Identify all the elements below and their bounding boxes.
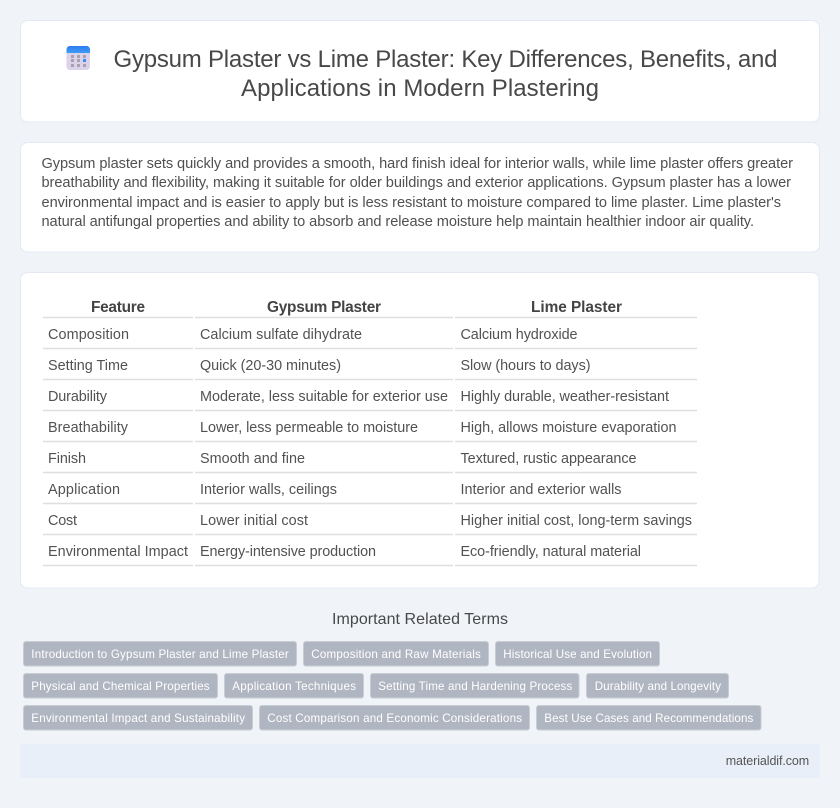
text block: summary paragraph: [42, 156, 793, 230]
table header row: Lime Plaster: [531, 299, 622, 316]
table header row: Feature: [91, 299, 145, 316]
row: application: [43, 482, 697, 504]
tag: introduction: [24, 642, 296, 666]
text block: summary paragraph: breathability and flexibility, making it suitable for older buildings and exterior applications. Gypsum plaster has a lower: [42, 175, 791, 191]
text block: summary paragraph: environmental impact and is easier to apply but is less resistant to moisture compared to lime plaster. Lime plaster's: [42, 195, 781, 211]
title: [114, 46, 778, 102]
row: application: Interior walls, ceilings: [200, 482, 337, 498]
tag: durability: Durability and Longevity: [595, 680, 721, 693]
tag: best use: [536, 706, 761, 730]
tag: best use: Best Use Cases and Recommendations: [544, 712, 754, 725]
tag: environmental: Environmental Impact and Sustainability: [31, 712, 245, 725]
row: composition: Composition: [48, 327, 129, 343]
tag: historical use: [496, 642, 660, 666]
row: composition: Calcium hydroxide: [460, 327, 578, 343]
text block: summary paragraph: Gypsum plaster sets quickly and provides a smooth, hard finish ideal for interior walls, while lime plaster offers greater: [42, 156, 793, 172]
row: breathability: Breathability: [48, 420, 129, 436]
row: application: Application: [48, 482, 120, 498]
footer site name: materialdif.com: [726, 754, 809, 768]
tag: cost: [260, 706, 530, 730]
row: composition: Calcium sulfate dihydrate: [200, 327, 362, 343]
footer: [20, 744, 820, 778]
tag: properties: Physical and Chemical Properties: [31, 680, 210, 693]
row: environmental impact: Energy-intensive production: [200, 544, 376, 560]
row: cost: [43, 513, 697, 534]
row: setting time: Quick (20-30 minutes): [200, 358, 341, 374]
row: cost: Lower initial cost: [200, 513, 308, 529]
row: finish: Smooth and fine: [200, 451, 305, 467]
table header row: [43, 299, 697, 318]
row: environmental impact: Environmental Impact: [48, 544, 188, 560]
row: finish: [43, 451, 697, 472]
row: setting time: Setting Time: [48, 358, 128, 374]
tag: historical use: Historical Use and Evolution: [503, 648, 652, 661]
title: Applications in Modern Plastering: [241, 75, 599, 102]
row: environmental impact: Eco-friendly, natural material: [460, 544, 641, 560]
panel: comparison table card: [20, 272, 819, 588]
tag: environmental: [24, 706, 252, 730]
row: durability: Durability: [48, 389, 108, 405]
tag: techniques: Application Techniques: [232, 680, 356, 693]
row: durability: Highly durable, weather-resistant: [460, 389, 669, 405]
icon: calendar: [66, 46, 90, 70]
title: Gypsum Plaster vs Lime Plaster: Key Differences, Benefits, and: [114, 46, 778, 73]
row: cost: Cost: [48, 513, 77, 529]
text block: summary paragraph: natural antifungal properties and ability to absorb and release moisture help maintain healthier indoor air quality.: [42, 214, 754, 230]
row: breathability: Lower, less permeable to moisture: [200, 420, 418, 436]
tag: properties: [24, 674, 218, 698]
tag group: related term chips: [24, 642, 761, 730]
panel: introduction: [20, 142, 820, 252]
table: feature comparison: [43, 299, 697, 566]
row: composition: [43, 327, 697, 348]
row: finish: Textured, rustic appearance: [460, 451, 636, 467]
tag: composition: [304, 642, 488, 666]
row: durability: Moderate, less suitable for exterior use: [200, 389, 448, 405]
row: breathability: [43, 420, 697, 442]
row: application: Interior and exterior walls: [460, 482, 622, 498]
panel: related terms: [24, 611, 761, 730]
row: finish: Finish: [48, 451, 86, 467]
tag: cost: Cost Comparison and Economic Considerations: [267, 712, 522, 725]
panel: header card: [20, 20, 820, 122]
row: setting time: Slow (hours to days): [460, 358, 590, 374]
tag: setting time: [370, 674, 579, 698]
tag: techniques: [224, 674, 364, 698]
tag: durability: [586, 674, 728, 698]
row: setting time: [43, 358, 697, 380]
table header row: Gypsum Plaster: [267, 299, 381, 316]
row: cost: Higher initial cost, long-term savings: [460, 513, 692, 529]
row: environmental impact: [43, 544, 697, 566]
tag: setting time: Setting Time and Hardening Process: [378, 680, 573, 693]
row: breathability: High, allows moisture evaporation: [460, 420, 676, 436]
tag: introduction: Introduction to Gypsum Plaster and Lime Plaster: [31, 648, 289, 661]
tag: composition: Composition and Raw Materials: [311, 648, 481, 661]
heading: important related terms: Important Related Terms: [332, 611, 508, 628]
row: durability: [43, 389, 697, 410]
